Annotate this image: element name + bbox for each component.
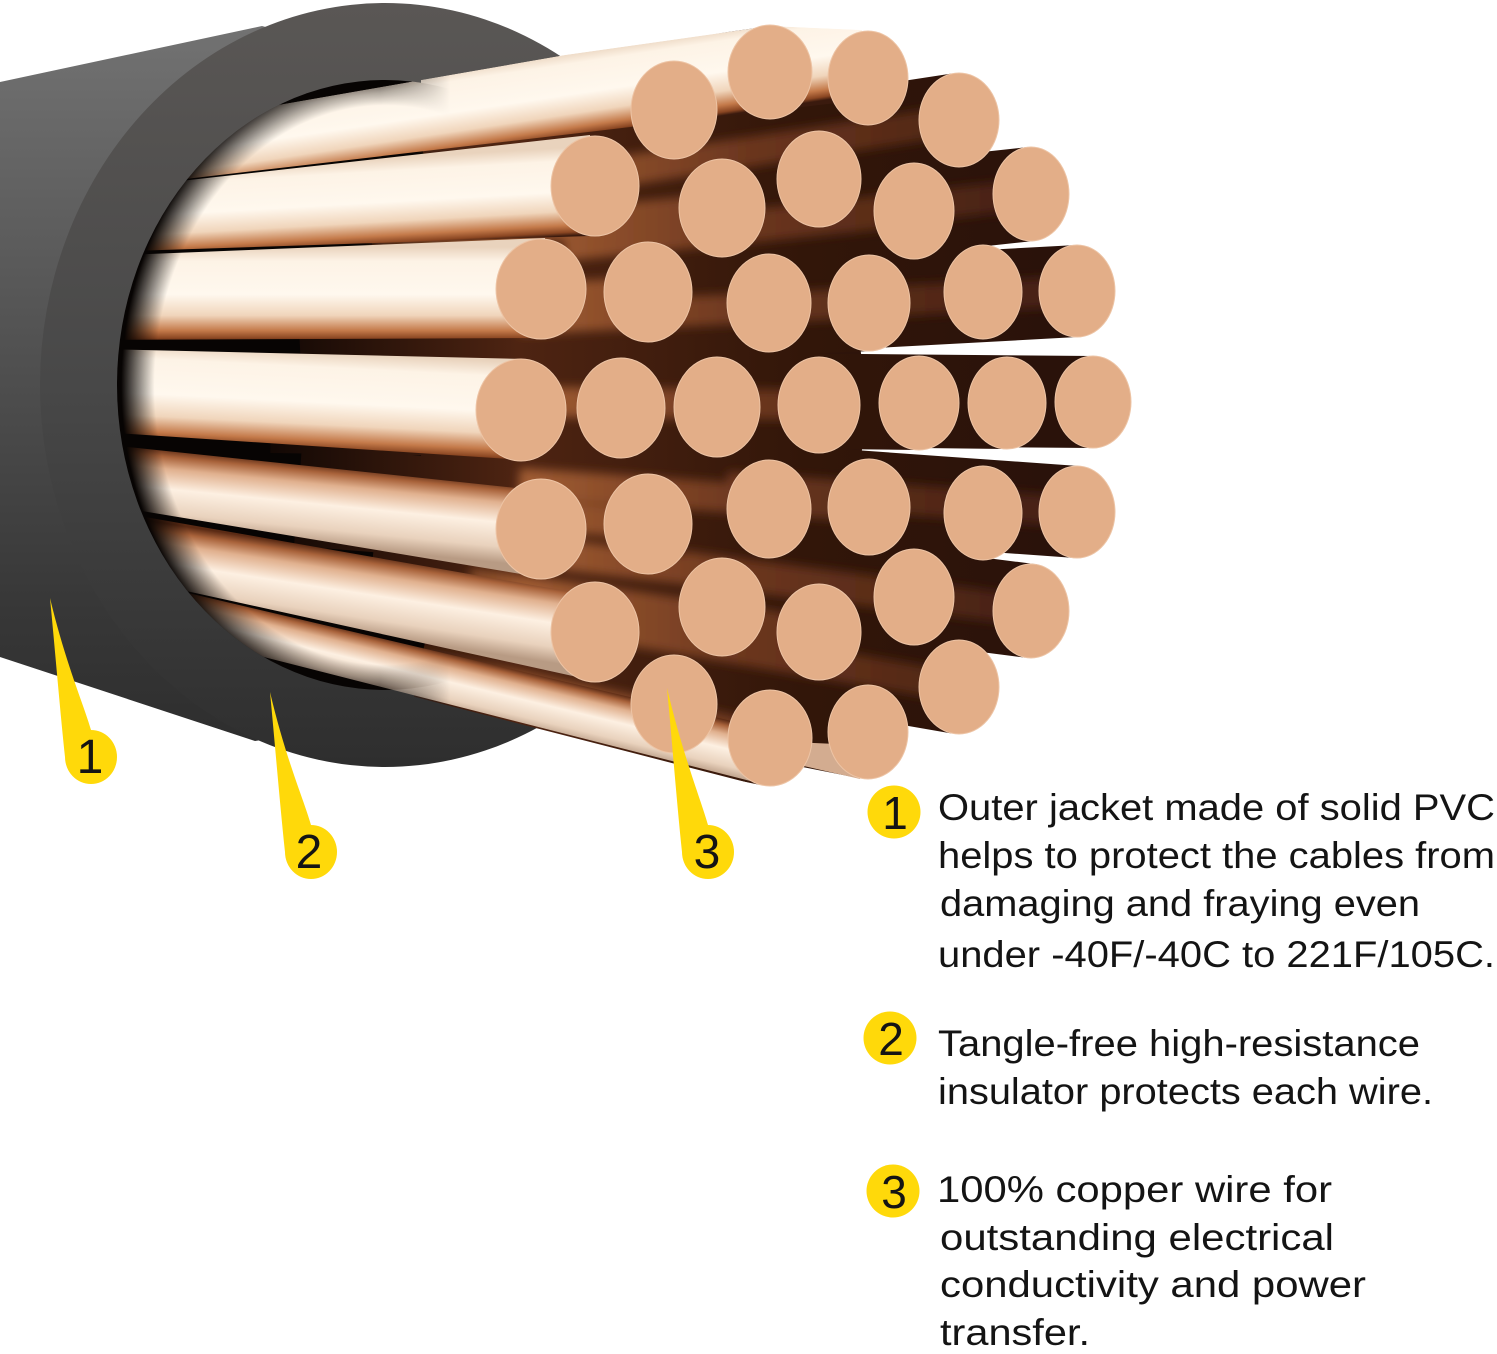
- badge 2: 2: [878, 1013, 904, 1065]
- callout pin 2: 2: [296, 826, 322, 879]
- hollow jacket interior: [117, 80, 653, 690]
- jacket end face: [40, 3, 730, 767]
- description 3: transfer.: [940, 1312, 1090, 1353]
- badge 3: [866, 1164, 920, 1218]
- copper strands: [100, 26, 1093, 786]
- description 1: [938, 787, 1495, 975]
- callout pin 1: [50, 598, 117, 784]
- description 1: under -40F/-40C to 221F/105C.: [938, 934, 1495, 975]
- legend item 1: [868, 786, 1495, 975]
- callout pin 1: 1: [77, 731, 103, 784]
- badge 1: 1: [882, 787, 908, 839]
- callout pin 2: [270, 692, 337, 879]
- badge 1: [868, 786, 920, 839]
- description 2: insulator protects each wire.: [938, 1071, 1433, 1112]
- description 1: helps to protect the cables from: [938, 835, 1495, 876]
- outer jacket body: [0, 26, 385, 741]
- callout pin 3: 3: [694, 826, 720, 879]
- description 3: [937, 1169, 1366, 1353]
- strand cut faces: [476, 25, 1131, 786]
- badge 3: 3: [881, 1166, 907, 1218]
- cable illustration: [0, 3, 1131, 786]
- description 3: conductivity and power: [940, 1264, 1366, 1305]
- description 2: Tangle-free high-resistance: [938, 1023, 1420, 1064]
- bright outer strands: [188, 26, 862, 178]
- description 3: 100% copper wire for: [937, 1169, 1332, 1210]
- description 3: outstanding electrical: [940, 1217, 1334, 1258]
- description 2: [938, 1023, 1433, 1112]
- legend item 2: [864, 1012, 1433, 1112]
- description 1: damaging and fraying even: [940, 883, 1420, 924]
- callout pin 3: [667, 688, 734, 879]
- legend item 3: [866, 1164, 1366, 1353]
- badge 2: [864, 1012, 916, 1065]
- description 1: Outer jacket made of solid PVC: [938, 787, 1495, 828]
